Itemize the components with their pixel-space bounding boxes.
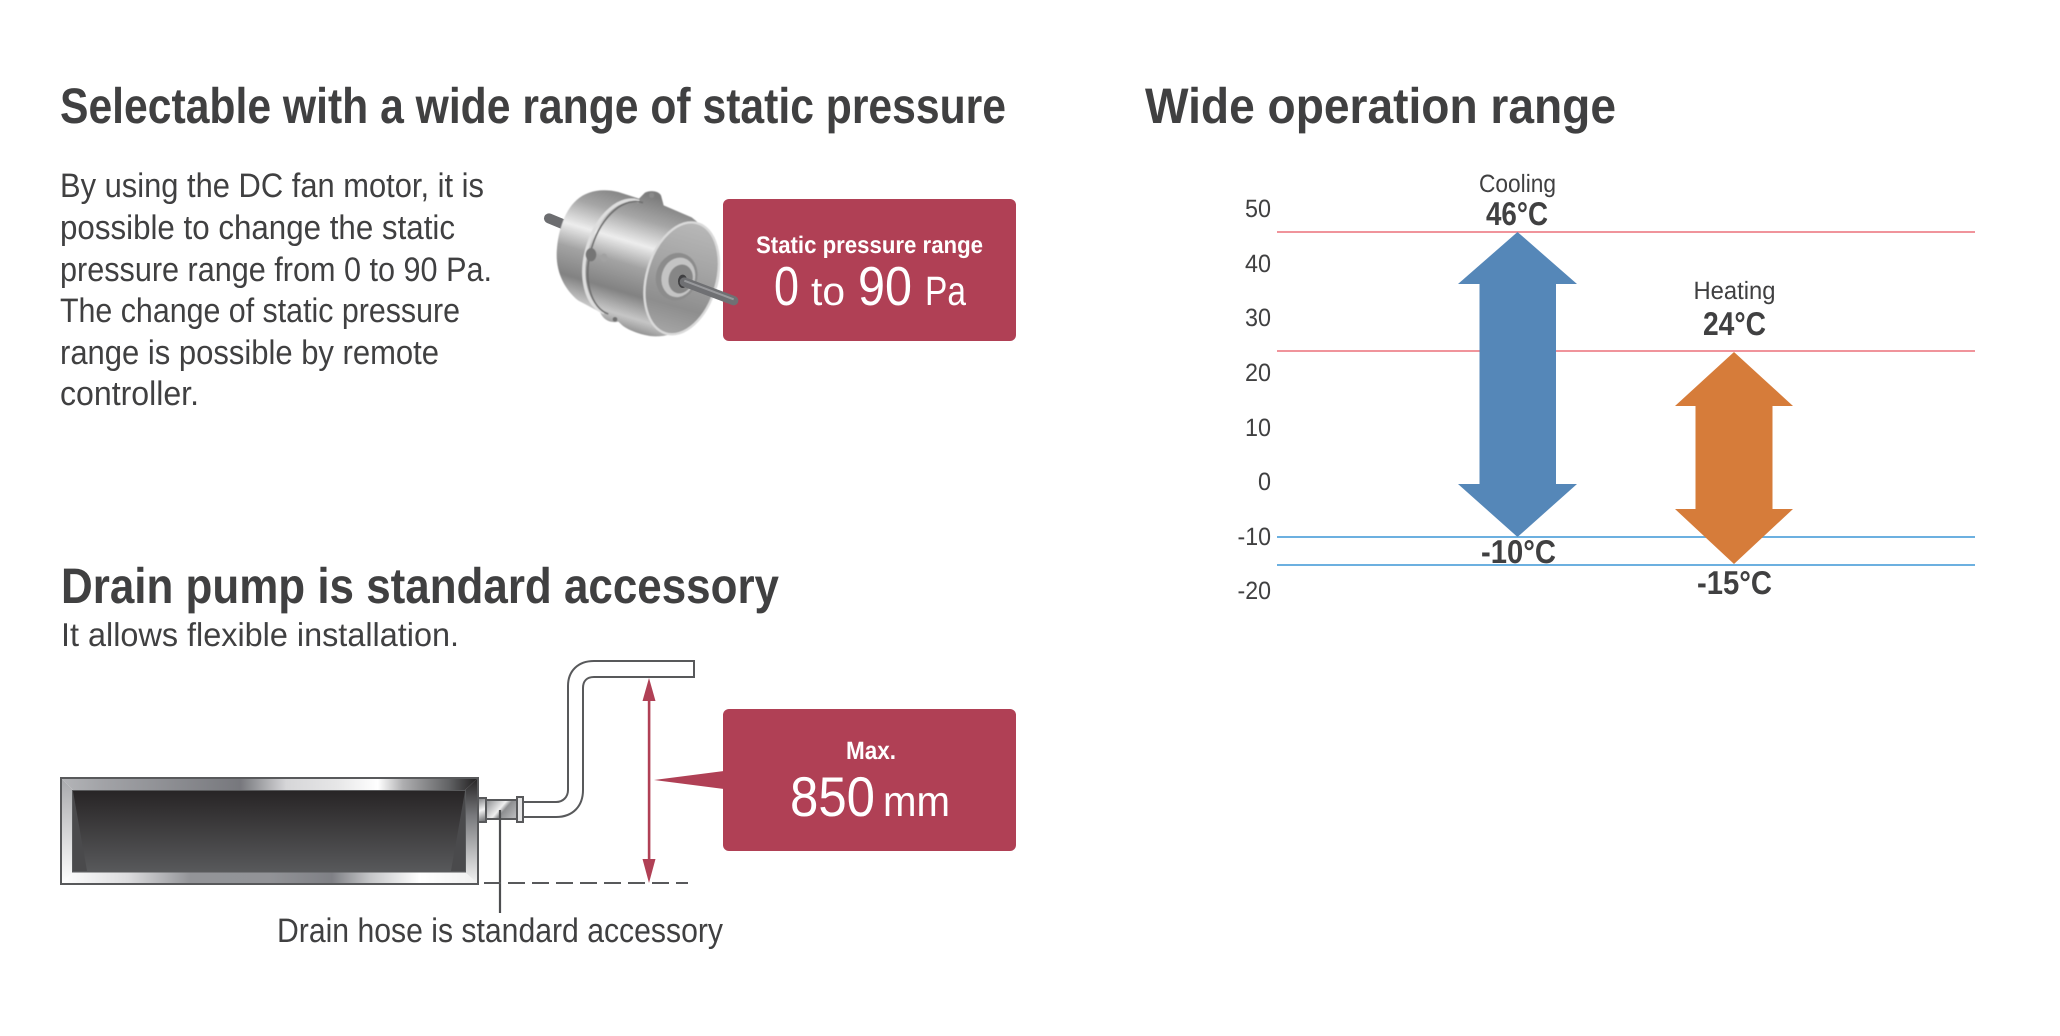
heading: operation range: Wide operation range (1145, 78, 1616, 134)
callout: static pressure range: to (811, 270, 845, 314)
heading: drain pump: Drain pump is standard accessory (61, 558, 779, 614)
callout: static pressure range: 90 (858, 255, 912, 317)
text block: static pressure description: range is possible by remote (60, 334, 439, 372)
drain hose leader (499, 810, 501, 913)
icon: DC fan motor (549, 190, 734, 343)
text block: static pressure description (60, 167, 492, 413)
cooling label: Cooling (1479, 170, 1556, 198)
y axis labels (1238, 195, 1271, 605)
diagram: indoor unit with drain pipe (61, 661, 694, 913)
height arrow (642, 678, 656, 883)
heating max value: 24°C (1703, 305, 1766, 342)
cooling range arrow (1458, 232, 1577, 537)
callout: static pressure range: Pa (925, 268, 966, 314)
chart: operation range (1238, 170, 1975, 605)
text block: drain pump subtitle: It allows flexible installation. (61, 616, 459, 653)
heating min value: -15°C (1697, 564, 1772, 601)
y axis labels: -10 (1238, 523, 1271, 551)
callout: static pressure range: 0 (774, 255, 799, 317)
y axis labels: 10 (1245, 414, 1271, 442)
text block: static pressure description: The change of static pressure (60, 292, 460, 330)
callout: max height 850 mm: mm (883, 778, 950, 826)
heating label: Heating (1694, 277, 1776, 305)
text block: static pressure description: By using the DC fan motor, it is (60, 167, 484, 205)
heading: static pressure: Selectable with a wide range of static pressure (60, 78, 1006, 134)
y axis labels: 30 (1245, 304, 1271, 332)
level dashed line (484, 882, 688, 884)
text block: static pressure description: controller. (60, 375, 199, 413)
cooling max value: 46°C (1486, 195, 1548, 232)
callout: max height 850 mm (654, 709, 1016, 851)
text block: static pressure description: possible to change the static (60, 209, 455, 247)
y axis labels: 40 (1245, 250, 1271, 278)
text block: static pressure description: pressure range from 0 to 90 Pa. (60, 251, 492, 289)
limit lines (1277, 232, 1975, 565)
cooling min value: -10°C (1481, 533, 1556, 570)
y axis labels: 20 (1245, 359, 1271, 387)
label: drain hose: Drain hose is standard accessory (277, 912, 723, 950)
drain pipe (523, 661, 694, 817)
drain hose fitting (478, 797, 523, 822)
indoor unit body (61, 778, 478, 884)
callout: max height 850 mm: Max. (846, 737, 896, 765)
y axis labels: 50 (1245, 195, 1271, 223)
y axis labels: 0 (1258, 468, 1271, 496)
heating range arrow (1675, 352, 1793, 564)
callout: max height 850 mm: 850 (790, 765, 875, 828)
y axis labels: -20 (1238, 577, 1271, 605)
callout: static pressure range (723, 199, 1016, 341)
callout: static pressure range: Static pressure range (756, 232, 983, 259)
